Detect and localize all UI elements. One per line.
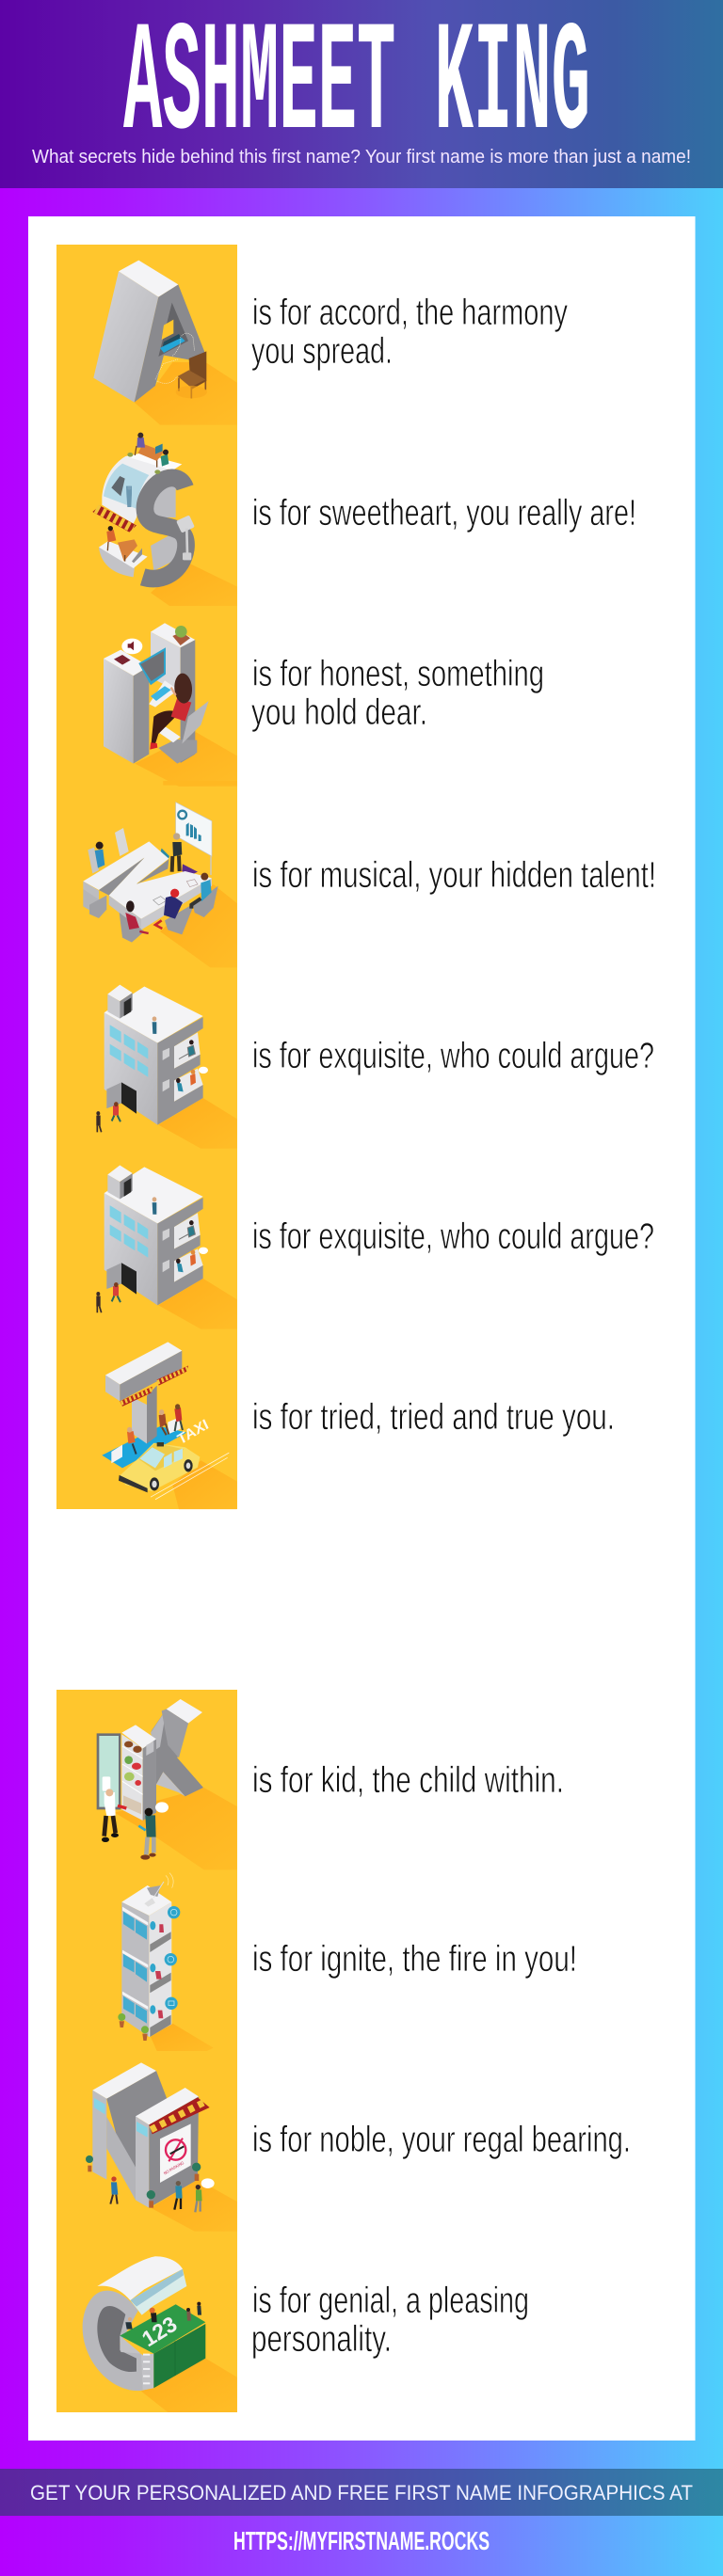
icon: letter S building (92, 433, 237, 606)
icon: letter A building (93, 261, 237, 425)
row text: I: is for ignite, the fire in you! (252, 1939, 577, 1980)
sign caption: NO PARKING (163, 2160, 185, 2176)
icon: letter N building (86, 2062, 237, 2232)
icon: letter M meeting table (83, 781, 237, 967)
footer band (0, 2469, 723, 2516)
row text: A: you spread. (251, 331, 393, 372)
3D number block: 123 (137, 2312, 181, 2351)
row text: H: is for honest, something (252, 654, 544, 694)
yellow tile column: KING (56, 1690, 237, 2412)
tagline: What secrets hide behind this first name? Your first name is more than just a name! (32, 147, 691, 167)
white content panel (28, 216, 695, 2441)
footer call to action: GET YOUR PERSONALIZED AND FREE FIRST NAME INFOGRAPHICS AT (30, 2481, 693, 2504)
icon: letter H building (104, 623, 237, 787)
row text: G: personality. (251, 2319, 392, 2360)
row text: A: is for accord, the harmony (252, 293, 568, 333)
icon: letter E building (96, 985, 237, 1149)
row text: T: is for tried, tried and true you. (252, 1397, 615, 1438)
icon: letter G garden (83, 2256, 237, 2412)
header band (0, 0, 723, 188)
row text: H: you hold dear. (251, 692, 427, 733)
icon: letter E building (second) (96, 1166, 237, 1329)
footer site address: HTTPS://MYFIRSTNAME.ROCKS (233, 2526, 490, 2555)
row text: G: is for genial, a pleasing (252, 2281, 529, 2321)
icon: letter T taxi stand (102, 1342, 237, 1509)
yellow tile column: ASHMEET (56, 245, 237, 1509)
icon: letter K fridge (97, 1699, 237, 1869)
icon: letter I tower (118, 1873, 214, 2051)
taxi ground lettering: TAXI (175, 1417, 211, 1448)
row text: K: is for kid, the child within. (252, 1760, 564, 1801)
